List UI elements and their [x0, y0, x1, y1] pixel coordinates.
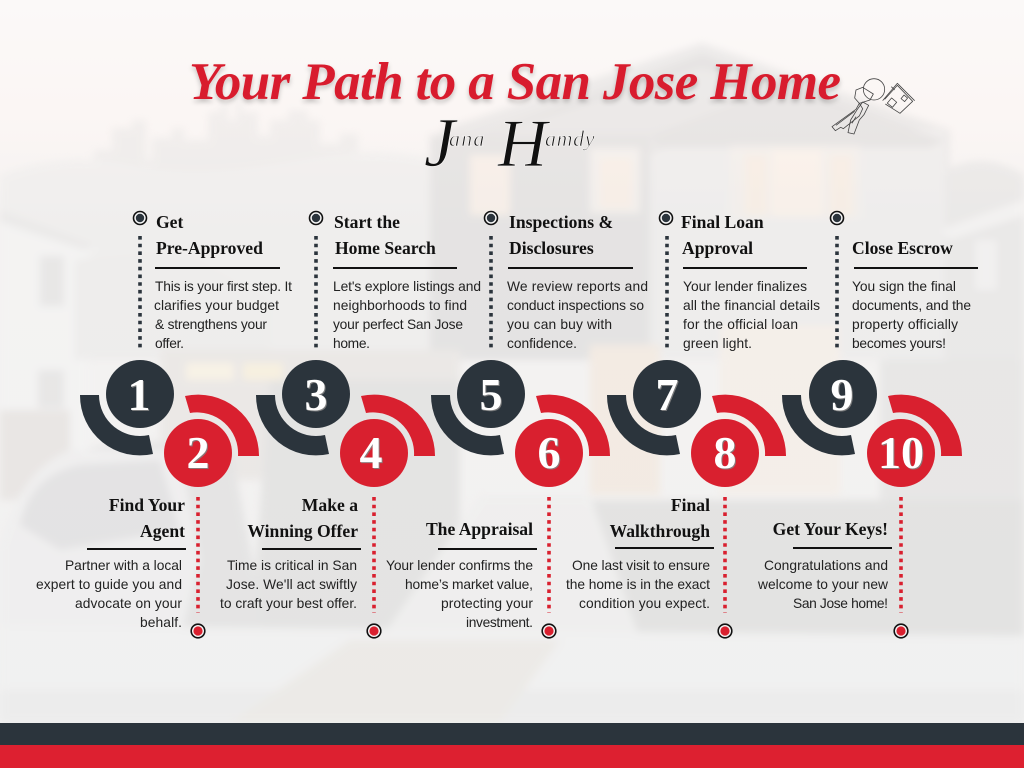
- step 1: Get Pre-Approved: offer.: [155, 336, 184, 351]
- badge 3: [256, 360, 350, 455]
- step 5: Inspections & Disclosures: We review reports and: [507, 279, 648, 294]
- step 4: Make a Winning Offer: to craft your best offer.: [220, 596, 357, 611]
- badge 10: [867, 395, 962, 487]
- step 3: Start the Home Search: neighborhoods to find: [333, 298, 467, 313]
- step 5: Inspections & Disclosures: Inspections &: [509, 212, 613, 232]
- badge 7: [607, 360, 701, 455]
- badge 8: 8: [714, 427, 736, 478]
- step 7: Final Loan Approval: for the official loan: [683, 317, 798, 332]
- step 5: Inspections & Disclosures: Disclosures: [509, 238, 594, 258]
- step 7: Final Loan Approval: green light.: [683, 336, 752, 351]
- step 3: Start the Home Search: Let's explore listings and: [333, 279, 481, 294]
- step 4: Make a Winning Offer: Winning Offer: [247, 521, 358, 541]
- step 8: Final Walkthrough: the home is in the exact: [566, 577, 710, 592]
- step 8: Final Walkthrough: condition you expect.: [579, 596, 710, 611]
- step 8: Final Walkthrough: [566, 495, 732, 638]
- step 3: Start the Home Search: your perfect San Jose: [333, 317, 463, 332]
- step 2: Find Your Agent: expert to guide you and: [36, 577, 182, 592]
- badge 2: [164, 395, 259, 487]
- step 7: Final Loan Approval: Your lender finalizes: [683, 279, 807, 294]
- step 10: Get Your Keys!: welcome to your new: [757, 577, 888, 592]
- step 5: Inspections & Disclosures: conduct inspections so: [507, 298, 644, 313]
- badge 6: 6: [538, 427, 560, 478]
- badge 7: 7: [656, 369, 678, 420]
- step 2: Find Your Agent: Partner with a local: [65, 558, 182, 573]
- step 1: Get Pre-Approved: This is your first step. It: [155, 279, 292, 294]
- badge 9: [782, 360, 877, 455]
- step 7: Final Loan Approval: all the financial details: [683, 298, 820, 313]
- step 6: The Appraisal: The Appraisal: [426, 519, 533, 539]
- step 4: Make a Winning Offer: Make a: [302, 495, 358, 515]
- step 2: Find Your Agent: advocate on your: [75, 596, 182, 611]
- badge 10: 10: [878, 427, 924, 478]
- step 9: Close Escrow: Close Escrow: [852, 238, 953, 258]
- step 10: Get Your Keys!: Get Your Keys!: [773, 519, 888, 539]
- badge 6: [515, 395, 610, 487]
- step 1: Get Pre-Approved: & strengthens your: [155, 317, 267, 332]
- badge 3: 3: [304, 369, 328, 420]
- step 6: The Appraisal: protecting your: [441, 596, 533, 611]
- step 6: The Appraisal: investment.: [466, 615, 533, 630]
- badge 4: 4: [360, 427, 382, 478]
- step 2: Find Your Agent: Agent: [140, 521, 185, 541]
- step 2: Find Your Agent: Find Your: [109, 495, 185, 515]
- signature: J: [424, 105, 458, 182]
- step 4: Make a Winning Offer: Jose. We'll act swiftly: [226, 577, 357, 592]
- step 3: Start the Home Search: Home Search: [335, 238, 436, 258]
- badge 9: 9: [830, 369, 854, 420]
- step 6: The Appraisal: Your lender confirms the: [386, 558, 533, 573]
- step 8: Final Walkthrough: Final: [671, 495, 710, 515]
- step 9: Close Escrow: property officially: [852, 317, 958, 332]
- title: Your Path to a San Jose Home: [189, 53, 841, 111]
- step 3: Start the Home Search: Start the: [334, 212, 400, 232]
- badge 5: 5: [480, 369, 502, 420]
- step 2: Find Your Agent: behalf.: [140, 615, 182, 630]
- footer band: red: [0, 745, 1024, 768]
- step 2: Find Your Agent: [36, 495, 205, 638]
- step 9: Close Escrow: [830, 212, 978, 351]
- step 6: The Appraisal: [386, 497, 556, 638]
- step 7: Final Loan Approval: [660, 212, 820, 351]
- badge 1: 1: [128, 369, 150, 420]
- icon: house keys: [832, 79, 915, 134]
- badge 4: [340, 395, 435, 487]
- badge 2: 2: [186, 427, 210, 478]
- step 3: Start the Home Search: home.: [333, 336, 370, 351]
- footer band: navy: [0, 723, 1024, 745]
- step 8: Final Walkthrough: Walkthrough: [610, 521, 710, 541]
- step 9: Close Escrow: You sign the final: [852, 279, 956, 294]
- step 9: Close Escrow: becomes yours!: [852, 336, 946, 351]
- step 10: Get Your Keys!: San Jose home!: [793, 596, 888, 611]
- step 10: Get Your Keys!: Congratulations and: [764, 558, 888, 573]
- step 8: Final Walkthrough: One last visit to ensure: [572, 558, 710, 573]
- step 6: The Appraisal: home’s market value,: [405, 577, 533, 592]
- step 1: Get Pre-Approved: [134, 212, 292, 351]
- badge 8: [691, 395, 786, 487]
- step 10: Get Your Keys!: [757, 497, 908, 638]
- signature: H: [497, 105, 551, 181]
- step 5: Inspections & Disclosures: you can buy with: [507, 317, 612, 332]
- badge 1: [80, 360, 174, 455]
- step 7: Final Loan Approval: Final Loan: [681, 212, 764, 232]
- step 4: Make a Winning Offer: [220, 495, 381, 638]
- signature: ana: [449, 126, 486, 151]
- step 9: Close Escrow: documents, and the: [852, 298, 971, 313]
- step 1: Get Pre-Approved: clarifies your budget: [154, 298, 279, 313]
- step 4: Make a Winning Offer: Time is critical in San: [227, 558, 357, 573]
- step 1: Get Pre-Approved: Get: [156, 212, 183, 232]
- step 1: Get Pre-Approved: Pre-Approved: [156, 238, 263, 258]
- step 5: Inspections & Disclosures: [484, 212, 648, 351]
- step 5: Inspections & Disclosures: confidence.: [507, 336, 577, 351]
- signature: amdy: [545, 126, 595, 151]
- step 7: Final Loan Approval: Approval: [682, 238, 753, 258]
- badge 5: [431, 360, 525, 455]
- step 3: Start the Home Search: [310, 212, 481, 351]
